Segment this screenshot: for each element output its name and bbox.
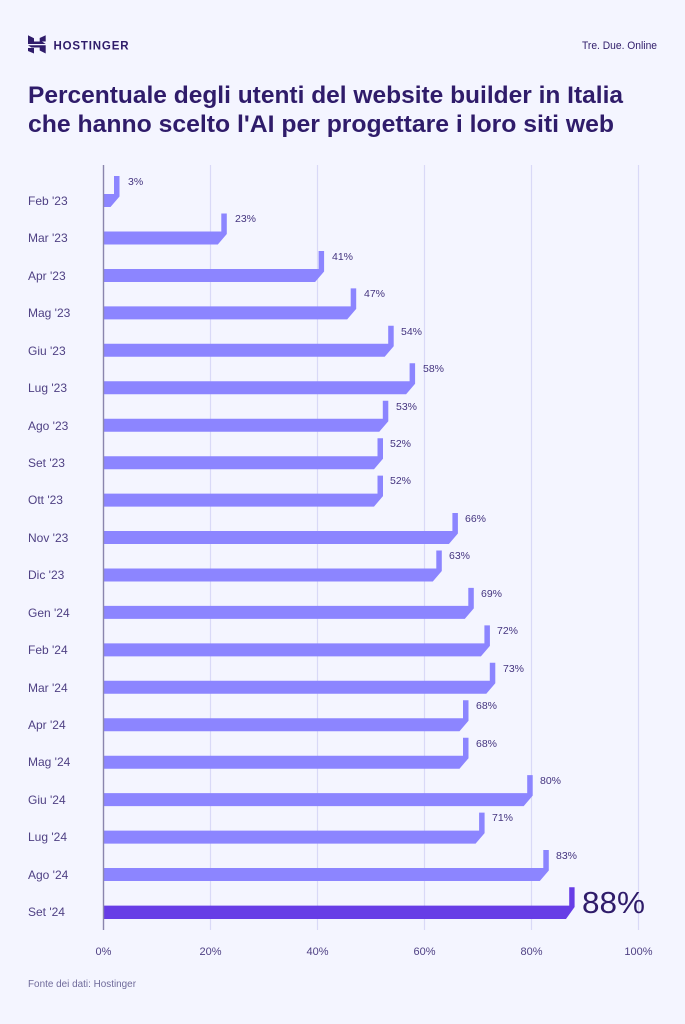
month labels: Giu '24 — [28, 793, 66, 807]
highlighted value: 88%: 88% — [582, 885, 645, 920]
value labels: 3% — [128, 176, 143, 188]
x axis labels: 0% — [96, 946, 112, 958]
month labels: Dic '23 — [28, 568, 65, 582]
value labels: 80% — [540, 775, 561, 787]
bar chart — [28, 165, 653, 958]
x axis labels: 60% — [413, 946, 436, 958]
value labels: 54% — [401, 326, 422, 338]
value labels — [128, 176, 577, 862]
value labels: 72% — [497, 625, 518, 637]
month labels: Giu '23 — [28, 344, 66, 358]
value labels: 63% — [449, 550, 470, 562]
value labels: 68% — [476, 738, 497, 750]
month labels: Mar '24 — [28, 681, 68, 695]
icon: Hostinger H — [28, 35, 46, 54]
month labels — [28, 194, 71, 919]
month labels: Mag '24 — [28, 755, 71, 769]
month labels: Ago '24 — [28, 868, 69, 882]
month labels: Mag '23 — [28, 306, 71, 320]
x axis labels: 100% — [624, 946, 653, 958]
x axis labels — [96, 946, 653, 958]
title: che hanno scelto l'AI per progettare i loro siti web — [28, 111, 614, 138]
value labels: 66% — [465, 513, 486, 525]
value labels: 52% — [390, 475, 411, 487]
attribution: Tre. Due. Online — [582, 40, 657, 52]
value labels: 53% — [396, 401, 417, 413]
value labels: 69% — [481, 588, 502, 600]
value labels: 52% — [390, 438, 411, 450]
month labels: Apr '23 — [28, 269, 66, 283]
logo wordmark: HOSTINGER — [54, 40, 129, 52]
title — [28, 82, 624, 138]
month labels: Apr '24 — [28, 718, 66, 732]
month labels: Lug '24 — [28, 830, 67, 844]
logo: Hostinger — [28, 35, 129, 54]
x axis labels: 80% — [520, 946, 543, 958]
month labels: Set '23 — [28, 456, 65, 470]
month labels: Feb '24 — [28, 643, 68, 657]
x axis labels: 20% — [199, 946, 222, 958]
value labels: 23% — [235, 213, 256, 225]
value labels: 83% — [556, 850, 577, 862]
value labels: 58% — [423, 363, 444, 375]
chart grid lines — [210, 165, 638, 930]
x axis labels: 40% — [306, 946, 329, 958]
value labels: 41% — [332, 251, 353, 263]
highlighted bar: Set '24 — [104, 887, 575, 919]
value labels: 73% — [503, 663, 524, 675]
month labels: Set '24 — [28, 905, 65, 919]
month labels: Ago '23 — [28, 419, 69, 433]
month labels: Feb '23 — [28, 194, 68, 208]
value labels: 68% — [476, 700, 497, 712]
value labels: 47% — [364, 288, 385, 300]
month labels: Mar '23 — [28, 231, 68, 245]
month labels: Nov '23 — [28, 531, 69, 545]
y axis line — [102, 165, 104, 930]
month labels: Gen '24 — [28, 606, 70, 620]
source note: Fonte dei dati: Hostinger — [28, 979, 137, 990]
month labels: Ott '23 — [28, 493, 63, 507]
value labels: 71% — [492, 812, 513, 824]
month labels: Lug '23 — [28, 381, 67, 395]
bars — [104, 176, 549, 881]
title: Percentuale degli utenti del website builder in Italia — [28, 82, 624, 109]
